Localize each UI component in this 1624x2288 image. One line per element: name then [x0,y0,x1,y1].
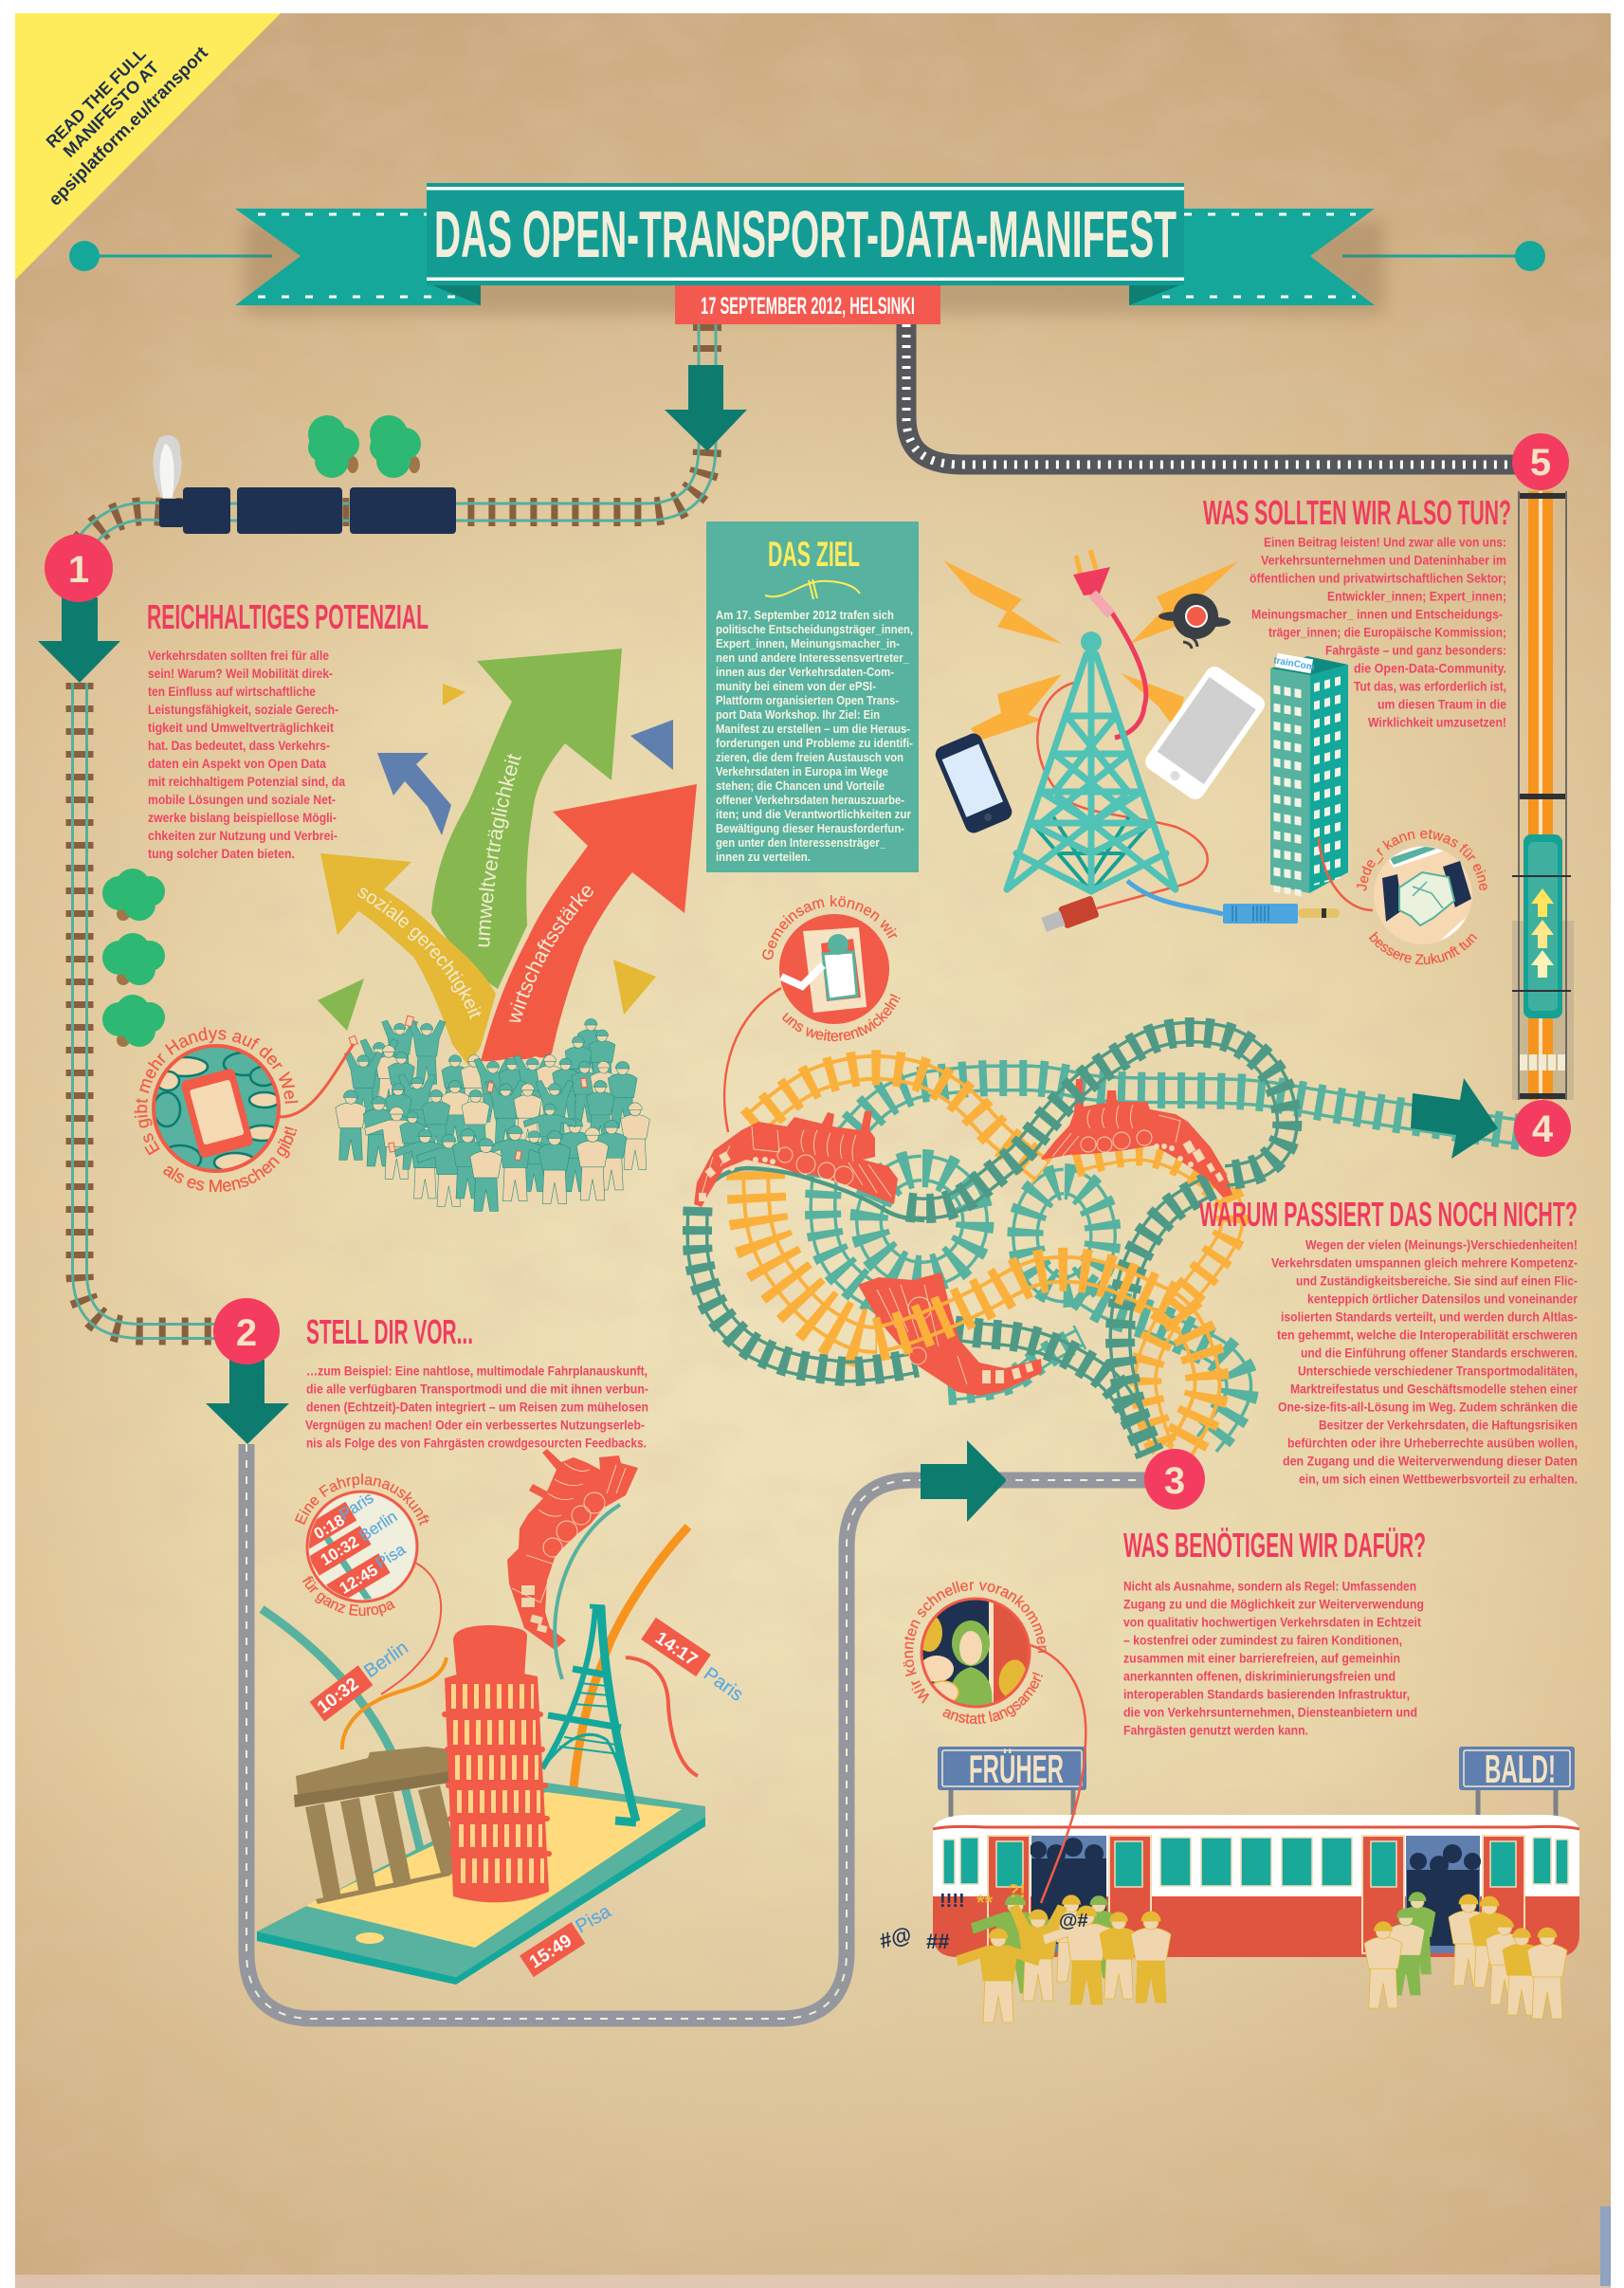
text block: was benötigen wir dafür: Zugang zu und die Möglichkeit zur Weiterverwendung [1123,1597,1424,1612]
text block: potenzial: chkeiten zur Nutzung und Verbrei- [148,829,338,843]
text block: stell dir vor [305,1364,648,1451]
callout: more phones than people [134,1027,355,1193]
time tag: pisa [520,1900,615,1977]
text block: warum passiert das noch nicht: isolierten Standards verteilt, und werden durch Altlas- [1281,1310,1578,1324]
text block: potenzial: zwerke bislang beispiellose Mögli- [148,811,337,825]
text block: potenzial [148,649,345,861]
trees top [308,415,421,478]
door openings [1031,1836,1106,1953]
symbols of frustration: #@ [877,1922,914,1953]
arrows chart: three benefits [318,649,697,1066]
panel: das ziel [706,522,919,872]
text block: warum passiert das noch nicht: kenteppich örtlicher Datensilos und voneinander [1307,1291,1578,1307]
text block: warum passiert das noch nicht: ein, um sich einen Wettbewerbsvorteil zu erhalten. [1299,1472,1578,1487]
time tag: berlin [310,1638,412,1722]
metro carriage [933,1815,1579,1957]
time tag: pisa: Pisa [573,1900,615,1937]
text block: was sollten wir also tun: Verkehrsunternehmen und Dateninhaber im [1261,554,1506,567]
text block: was benötigen wir dafür: interoperablen Standards basierenden Infrastruktur, [1123,1688,1410,1701]
title banner [235,183,1384,315]
symbols of frustration: !!!! [940,1891,965,1912]
marker 4 [1514,1100,1571,1157]
marker 1: 1 [68,549,89,591]
panel: das ziel: forderungen und Probleme zu identifi- [716,737,913,750]
text block: potenzial: mit reichhaltigem Potenzial sind, da [148,775,345,789]
text block: was benötigen wir dafür: Fahrgästen genutzt werden kann. [1123,1724,1308,1737]
marker 3: 3 [1164,1460,1185,1502]
text block: warum passiert das noch nicht: Marktreifestatus und Geschäftsmodelle stehen einer [1290,1382,1578,1396]
callout: handshake [1318,829,1487,965]
connector to früher crowd [1031,1645,1086,1903]
smoke [153,435,182,498]
panel: das ziel: Plattform organisierten Open Trans- [716,694,899,707]
marker 5 [1512,433,1569,490]
text block: potenzial: Verkehrsdaten sollten frei für alle [148,649,329,663]
railway step 1 to step 2 [80,683,218,1331]
text block: was benötigen wir dafür: – kostenfrei oder zumindest zu fairen Konditionen, [1123,1633,1402,1648]
arrow: wirtschaftsstärke: wirtschaftsstärke [509,886,593,1022]
callout: gemeinsam [750,883,919,1056]
text block: was benötigen wir dafür: zusammen mit einer barrierefreien, auf gemeinhin [1123,1652,1400,1665]
callout: handshake: bessere Zukunft tun [1365,929,1481,968]
text block: warum passiert das noch nicht: Besitzer der Verkehrsdaten, die Haftungsrisiken [1319,1419,1578,1432]
callout: faster not slower [878,1555,1073,1750]
panel: das ziel: innen aus der Verkehrsdaten-Com- [716,666,894,679]
text block: stell dir vor: nis als Folge des von Fahrgästen crowdgesourcten Feedbacks. [306,1436,647,1451]
callout: timetable circle: 0:18 [311,1511,348,1543]
orange track over bottom train [877,1270,1208,1454]
building: trainCom [1272,655,1316,673]
arrow: soziale gerechtigkeit: soziale gerechtigkeit [357,888,482,1020]
text block: warum passiert das noch nicht: Wegen der vielen (Meinungs-)Verschiedenheiten! [1305,1238,1578,1252]
callout: timetable circle: Paris [337,1489,376,1524]
text block: was sollten wir also tun: Entwickler_innen; Expert_innen; [1327,590,1506,603]
text block: was sollten wir also tun: um diesen Traum in die [1378,698,1506,711]
sign: früher [938,1747,1086,1791]
panel: das ziel: DAS ZIEL [768,535,860,574]
text block: stell dir vor: die alle verfügbaren Transportmodi und die mit ihnen verbun- [306,1382,648,1396]
plug and red cable [1073,550,1146,738]
marker 3 [1144,1449,1205,1510]
text block: potenzial: tigkeit und Umweltverträglichkeit [148,721,334,735]
text block: stell dir vor: denen (Echtzeit)-Daten integriert – um Reisen zum mühelosen [306,1400,648,1415]
heading: Reichhaltiges Potenzial: REICHHALTIGES POTENZIAL [147,597,429,636]
steam train bottom on knot [858,1272,1042,1396]
track: dark teal lower [698,1185,1211,1454]
text block: was sollten wir also tun: Einen Beitrag leisten! Und zwar alle von uns: [1264,535,1506,550]
corner flag: read the full manifesto: READ THE FULL [43,45,150,152]
vertical metro line with train [1512,491,1574,1100]
heading: stell dir vor: STELL DIR VOR... [306,1312,473,1351]
sign: bald [1459,1747,1575,1791]
text block: warum passiert das noch nicht: ten gehemmt, welche die Interoperabilität erschweren [1277,1327,1578,1343]
panel: das ziel: innen zu verteilen. [716,851,811,864]
text block: warum passiert das noch nicht: Unterschiede verschiedener Transportmodalitäten, [1298,1364,1578,1379]
time tag: pisa: 15:49 [526,1931,575,1972]
marker 1 [45,534,113,602]
text block: was sollten wir also tun [1250,535,1506,730]
text block: was sollten wir also tun: öffentlichen und privatwirtschaftlichen Sektor; [1250,571,1506,586]
callout: timetable circle: Berlin [356,1508,400,1545]
callout: timetable circle: Pisa [373,1540,410,1572]
icon: beacon [1159,594,1231,649]
text block: warum passiert das noch nicht: den Zugang und die Weiterverwendung dieser Daten [1283,1455,1578,1468]
eiffel tower [542,1606,636,1822]
usb plug [1040,895,1100,936]
arrow: wirtschaftsstärke [481,784,697,1061]
arrow down from banner [665,365,747,451]
banner pin right [1342,241,1545,271]
trees left [102,869,165,1047]
arrow: soziale gerechtigkeit [320,853,496,1066]
time tag: berlin: Berlin [360,1638,412,1682]
text block: was sollten wir also tun: träger_innen; die Europäische Kommission; [1268,626,1506,639]
arrow step 2 [206,1360,289,1444]
panel: das ziel: Am 17. September 2012 trafen sich [716,609,894,622]
symbols of frustration: ?! [1008,1881,1026,1902]
symbols of frustration [877,1881,1088,1953]
panel: das ziel: munity bei einem von der ePSI- [716,680,876,693]
icon: phone [933,731,1014,835]
callout: timetable circle: Eine Fahrplanauskunft [293,1473,432,1528]
tablet [257,1783,705,1985]
text block: stell dir vor: …zum Beispiel: Eine nahtlose, multimodale Fahrplanauskunft, [306,1364,648,1379]
sign: früher: FRÜHER [969,1747,1064,1791]
railway from banner to step 1 [81,324,707,548]
callout: handshake: Jede_r kann etwas für eine [1354,826,1492,892]
time tag: berlin: 10:32 [314,1675,362,1718]
leaning tower of pisa [445,1625,549,1902]
callout: gemeinsam: Gemeinsam können wir [751,883,903,965]
panel: das ziel: port Data Workshop. Ihr Ziel: Ein [716,708,880,722]
panel: das ziel: stehen; die Chancen und Vorteile [716,779,885,793]
time tag: paris [641,1618,747,1706]
flying steam train [507,1449,638,1650]
callout: timetable circle: 12:45 [337,1561,381,1598]
panel: das ziel: iten; und die Verantwortlichkeiten zur [716,808,911,821]
text block: warum passiert das noch nicht: und Zuständigkeitsbereiche. Sie sind auf einen Flic- [1296,1274,1578,1288]
text block: potenzial: mobile Lösungen und soziale Net- [148,793,336,807]
panel: das ziel: Bewältigung dieser Herausforderfun- [716,822,904,835]
marker 4: 4 [1532,1108,1554,1150]
panel: das ziel: politische Entscheidungsträger_innen, [716,623,913,636]
text block: was benötigen wir dafür [1123,1580,1424,1737]
orderly crowd [1364,1893,1567,2019]
steam train [153,435,456,534]
tangled tracks knot [698,1068,1521,1454]
corner flag: read the full manifesto: epsiplatform.eu/transport [46,43,212,210]
arrow on road to the right [921,1440,1007,1522]
symbols of frustration: ** [976,1891,994,1914]
arrow: blue [377,753,451,835]
marker 2 [213,1298,280,1364]
text block: was sollten wir also tun: Meinungsmacher_ innen und Entscheidungs- [1251,607,1503,622]
panel: das ziel: nen und andere Interessensvertreter_ [716,651,910,665]
icon: white tablet phone [1141,663,1268,803]
sign: bald: BALD! [1485,1747,1556,1791]
lightning bolts [943,560,1238,741]
ribbons [262,1505,698,1909]
callout: gemeinsam: uns weiterentwickeln! [776,989,910,1055]
callout: more phones than people: als es Menschen gibt! [163,1126,298,1193]
marker 2: 2 [236,1312,257,1354]
banner pin left [69,241,272,271]
symbols of frustration: ## [926,1930,949,1953]
corner flag: read the full manifesto [15,13,281,280]
sign posts [951,1790,1556,1817]
crowd boarding chaotically [957,1894,1171,2023]
panel: das ziel: gen unter den Interessensträger_ [716,836,886,850]
callout: timetable circle: für ganz Europa [293,1571,401,1631]
steam train right on knot [1041,1079,1232,1198]
arrow: umweltverträglichkeit: umweltverträglichkeit [478,753,521,946]
text block: potenzial: ten Einfluss auf wirtschaftliche [148,685,316,699]
arrow to step 4 [1411,1078,1498,1159]
text block: warum passiert das noch nicht [1271,1238,1578,1487]
text block: potenzial: Leistungsfähigkeit, soziale Gerech- [148,703,338,717]
text block: potenzial: hat. Das bedeutet, dass Verkehrs- [148,739,330,753]
doors [988,1836,1524,1953]
text block: was benötigen wir dafür: anerkannten offenen, diskriminierungsfreien und [1123,1669,1396,1684]
text block: was sollten wir also tun: Tut das, was erforderlich ist, [1354,679,1506,694]
panel: das ziel: Verkehrsdaten in Europa im Wege [716,765,888,778]
callout: faster not slower: anstatt langsamer! [936,1665,1057,1744]
text block: warum passiert das noch nicht: Verkehrsdaten umspannen gleich mehrere Kompetenz- [1271,1255,1578,1271]
blue audio cable [1127,881,1340,924]
time tag: paris: 14:17 [651,1628,701,1671]
panel: das ziel: zieren, die dem freien Austausch von [716,751,903,764]
track: light teal [823,1078,1521,1444]
time tag: paris: Paris [700,1663,747,1706]
grey road from step 2 to step 3 [246,1444,1175,2019]
side windows [943,1838,1568,1886]
panel: das ziel: Manifest zu erstellen – um die Heraus- [716,723,910,736]
icon: radio tower [1007,631,1176,891]
text block: was benötigen wir dafür: von qualitativ hochwertigen Verkehrsdaten in Echtzeit [1123,1616,1421,1629]
text block: was sollten wir also tun: die Open-Data-Community. [1354,662,1506,675]
text block: warum passiert das noch nicht: und die Einführung offener Standards erschweren. [1301,1346,1578,1360]
crowd of people [336,1016,649,1211]
brandenburg gate [294,1747,461,1904]
connector from timetable circle [381,1563,441,1694]
callout: timetable circle: 10:32 [318,1532,362,1569]
text block: was benötigen wir dafür: die von Verkehrsunternehmen, Diensteanbietern und [1123,1705,1417,1720]
marker 5: 5 [1530,442,1551,484]
text block: stell dir vor: Vergnügen zu machen! Oder ein verbessertes Nutzungserleb- [305,1419,645,1432]
track: orange [752,1068,1232,1451]
text block: was benötigen wir dafür: Nicht als Ausnahme, sondern als Regel: Umfassenden [1123,1580,1416,1593]
steam train left on knot [694,1111,898,1207]
callout: faster not slower: Wir könnten schneller vorankommen [878,1555,1056,1707]
connector from Gemeinsam callout [724,988,781,1132]
text block: warum passiert das noch nicht: One-size-fits-all-Lösung im Weg. Zudem schränken die [1278,1400,1578,1415]
arrows up on train [1531,888,1554,978]
arrow: umweltverträglichkeit [431,649,622,989]
date label [675,285,940,324]
callout: timetable circle [276,1473,432,1636]
panel: das ziel: Expert_innen, Meinungsmacher_in- [716,637,900,650]
text block: potenzial: sein! Warum? Weil Mobilität direk- [148,667,333,681]
text block: was sollten wir also tun: Wirklichkeit umzusetzen! [1368,715,1506,730]
dark road from date to step 5 [906,324,1517,465]
panel: das ziel: offener Verkehrsdaten herauszuarbe- [716,794,904,807]
text block: potenzial: daten ein Aspekt von Open Data [148,757,326,771]
date label: 17 SEPTEMBER 2012, HELSINKI [701,293,915,320]
symbols of frustration: @# [1059,1911,1088,1931]
heading: was benötigen wir dafür: WAS BENÖTIGEN WIR DAFÜR? [1123,1526,1426,1565]
track: dark teal upper over train [907,1032,1287,1208]
text block: was sollten wir also tun: Fahrgäste – und ganz besonders: [1325,643,1506,658]
corner flag: read the full manifesto: MANIFESTO AT [60,58,163,161]
building [1270,652,1348,896]
text block: warum passiert das noch nicht: befürchten oder ihre Urheberrechte ausüben wollen, [1287,1436,1578,1451]
text block: potenzial: tung solcher Daten bieten. [148,847,295,861]
orange cable [1037,682,1208,908]
arrow step 1 [38,597,120,683]
